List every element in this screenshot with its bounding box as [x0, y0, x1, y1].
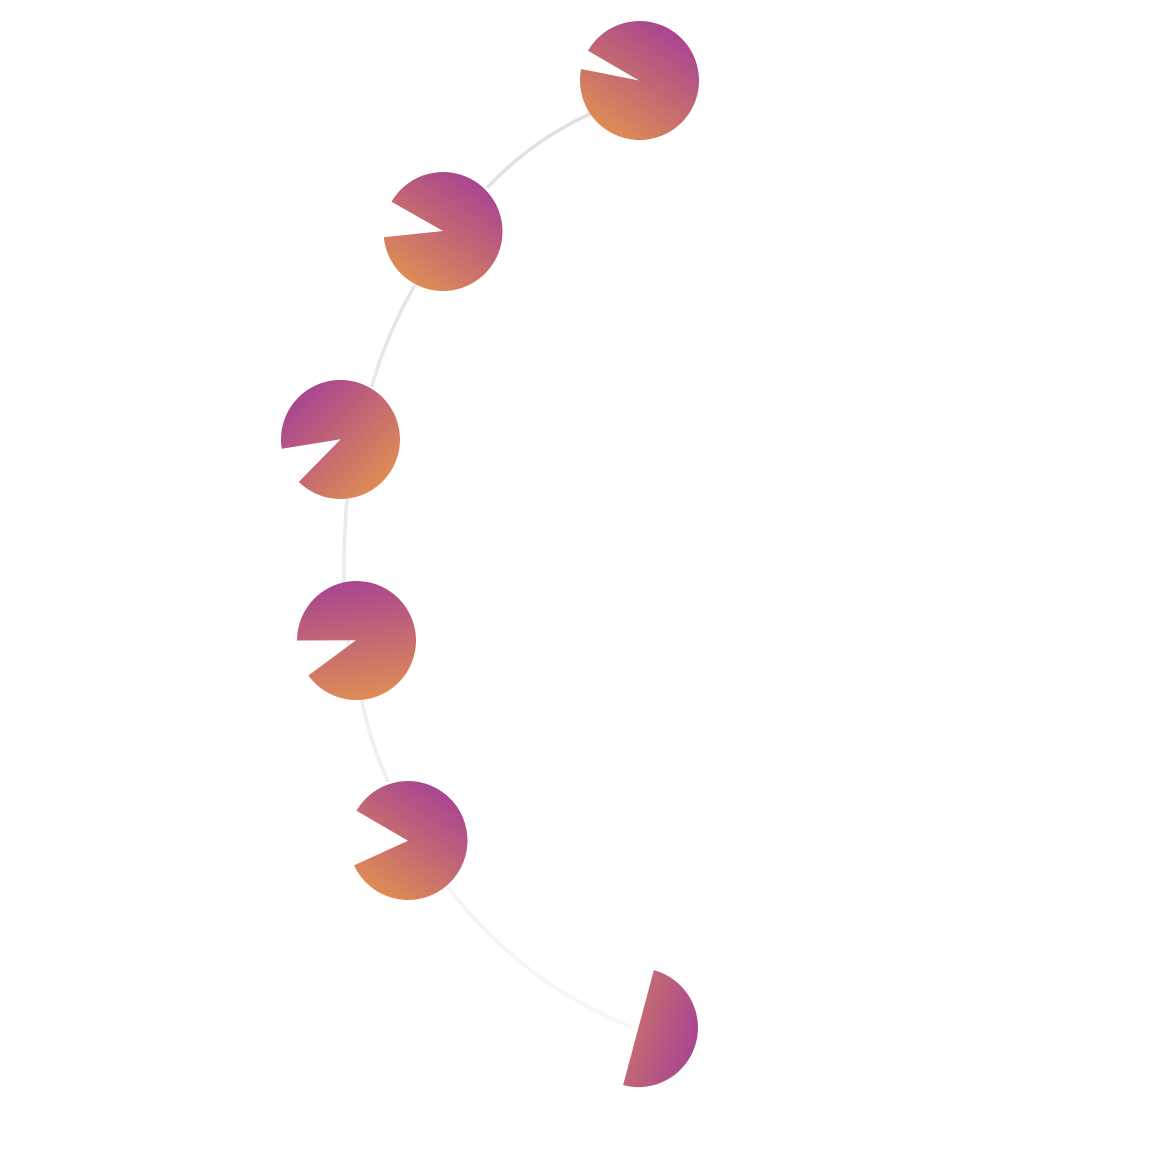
connecting arc [344, 113, 632, 1027]
pie marker 2 [384, 172, 502, 291]
pie marker 4 [297, 581, 416, 700]
pie marker 6 [623, 970, 698, 1087]
pie marker 3 [281, 380, 400, 499]
pie marker 1 [580, 21, 699, 140]
pie marker 5 [354, 781, 468, 900]
